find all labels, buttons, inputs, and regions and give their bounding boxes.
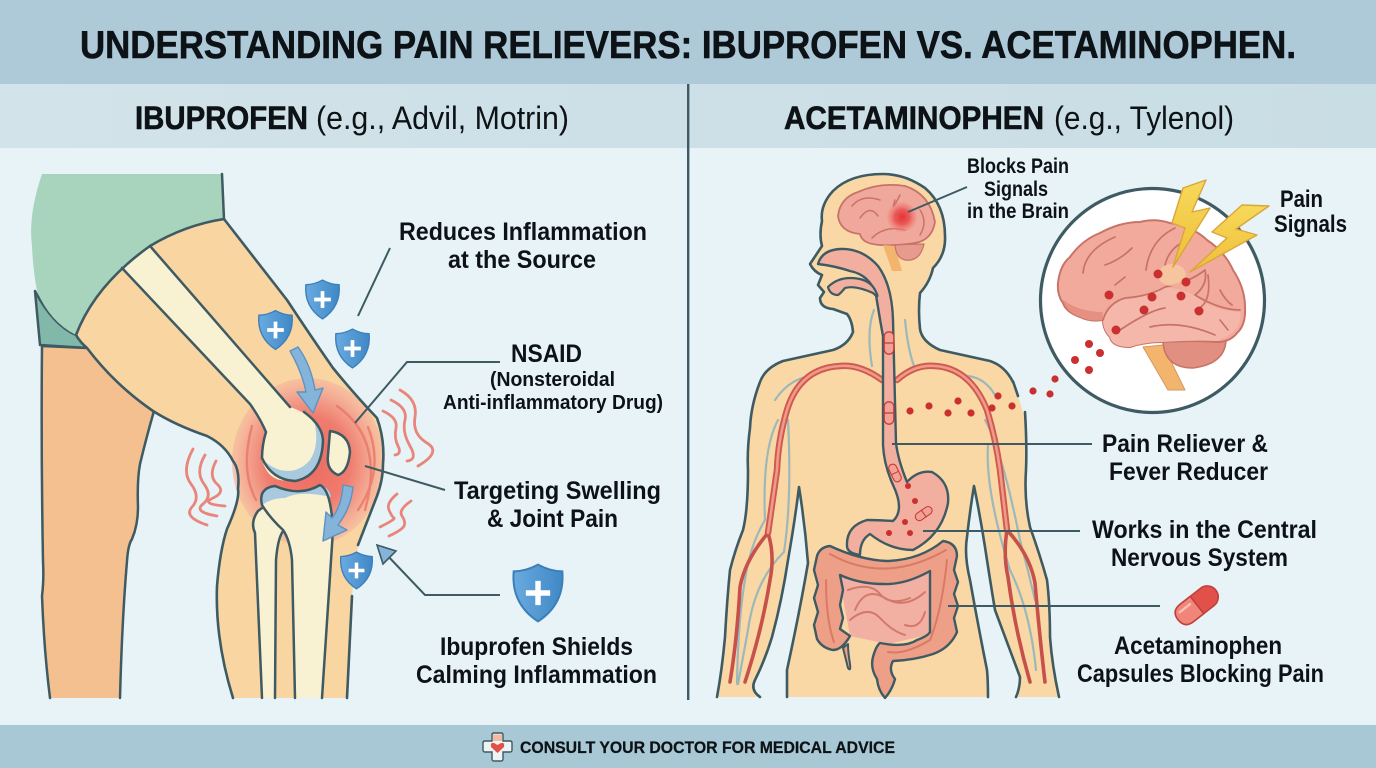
heading: ibuprofen <box>135 100 569 136</box>
leader: colon to capsule <box>948 605 1160 607</box>
body outline <box>717 174 1059 697</box>
patella <box>328 431 350 475</box>
capsule: stomach <box>914 505 934 522</box>
inset: brain with pain signals <box>1040 180 1269 412</box>
callout: NSAID: Anti-inflammatory Drug) <box>443 392 663 414</box>
arrow: shield to knee <box>290 347 323 413</box>
brain <box>1058 220 1245 347</box>
column header band <box>0 84 1376 148</box>
callout: capsules <box>1077 632 1324 688</box>
swelling waves lower <box>380 494 411 536</box>
front leg skin <box>76 219 383 698</box>
artery right <box>897 366 1045 682</box>
callout: central nervous system: Nervous System <box>1111 544 1288 572</box>
callout: blocks pain signals: in the Brain <box>967 200 1069 223</box>
back leg <box>42 346 154 698</box>
footer note: CONSULT YOUR DOCTOR FOR MEDICAL ADVICE <box>520 739 895 757</box>
mouth <box>828 278 877 296</box>
heading: acetaminophen <box>784 100 1234 136</box>
appendix <box>843 644 850 669</box>
callout: central nervous system <box>923 516 1317 572</box>
callout: pain reliever: Pain Reliever & <box>1102 430 1268 458</box>
fibula bone <box>253 508 284 698</box>
background panel <box>0 148 1376 725</box>
callout: reduces inflammation <box>358 218 647 316</box>
shorts <box>31 174 224 348</box>
callout: ibuprofen shields: Ibuprofen Shields <box>440 633 633 661</box>
arrow: through joint <box>323 485 353 541</box>
callout: blocks pain signals: Signals <box>984 178 1048 201</box>
swelling waves right <box>383 390 433 466</box>
capsule: lower esophagus <box>887 463 903 483</box>
callout: ibuprofen shields <box>416 633 657 689</box>
heading: acetaminophen: (e.g., Tylenol) <box>1054 100 1234 136</box>
veins <box>737 310 1036 684</box>
callout: blocks pain signals <box>908 155 1069 223</box>
capsule: throat <box>884 332 894 354</box>
icon: shield 3 <box>336 329 369 368</box>
heading: ibuprofen: (e.g., Advil, Motrin) <box>316 100 569 136</box>
brain stem <box>1143 345 1185 390</box>
callout: pain reliever <box>892 430 1268 486</box>
callout: pain reliever: Fever Reducer <box>1109 458 1268 486</box>
callout: blocks pain signals: Blocks Pain <box>967 155 1069 178</box>
column divider <box>687 84 689 700</box>
callout: pain signals: Signals <box>1274 211 1347 238</box>
callout: NSAID <box>355 340 663 423</box>
icon: shield 2 <box>306 280 339 319</box>
callout: capsules: Capsules Blocking Pain <box>1077 660 1324 688</box>
lightning bolt 1 <box>1172 180 1210 267</box>
lightning bolt 2 <box>1190 205 1269 272</box>
inflammation glow <box>232 378 384 546</box>
tibia bone <box>261 485 333 698</box>
small intestine <box>838 572 932 644</box>
callout: capsules: Acetaminophen <box>1114 632 1282 660</box>
callout: pain signals: Pain <box>1280 186 1323 213</box>
icon: medical cross <box>483 733 512 761</box>
panel: ibuprofen knee illustration <box>31 174 433 698</box>
callout: targeting swelling: & Joint Pain <box>487 505 618 533</box>
femur bone <box>122 246 323 481</box>
brain: small <box>838 185 935 271</box>
icon: shield 4 <box>341 552 372 589</box>
capsule: esophagus <box>884 402 894 424</box>
heading: acetaminophen: ACETAMINOPHEN <box>784 100 1044 136</box>
callouts: acetaminophen <box>892 155 1347 688</box>
icon: shield 1 <box>259 311 292 349</box>
digestive tract <box>818 249 948 555</box>
callout: central nervous system: Works in the Central <box>1092 516 1317 544</box>
callout: NSAID: NSAID <box>511 340 582 368</box>
callout: targeting swelling: Targeting Swelling <box>454 477 661 505</box>
callouts: ibuprofen <box>355 218 663 689</box>
large intestine <box>814 541 958 698</box>
callout: NSAID: (Nonsteroidal <box>490 369 615 391</box>
callout: targeting swelling <box>365 466 661 533</box>
stomach dots <box>886 483 918 536</box>
callout: reduces inflammation: Reduces Inflammation <box>399 218 647 246</box>
icon: large shield <box>513 565 563 621</box>
footer band <box>0 725 1376 768</box>
swelling waves left <box>186 449 225 525</box>
artery left <box>730 366 882 682</box>
inset circle <box>1040 188 1264 412</box>
arrow: shield callout <box>377 545 500 595</box>
traveling dots <box>906 375 1059 417</box>
callout: reduces inflammation: at the Source <box>448 246 596 274</box>
front leg outline <box>76 219 383 698</box>
cerebellum <box>1163 340 1226 368</box>
callout: pain signals <box>1274 186 1347 238</box>
callout: ibuprofen shields: Calming Inflammation <box>416 661 657 689</box>
brain dots <box>1071 270 1204 374</box>
title banner <box>0 0 1376 84</box>
icon: capsule <box>1171 582 1223 628</box>
panel: acetaminophen body illustration <box>717 174 1059 698</box>
body silhouette <box>717 174 1059 697</box>
heading: ibuprofen: IBUPROFEN <box>135 100 308 136</box>
